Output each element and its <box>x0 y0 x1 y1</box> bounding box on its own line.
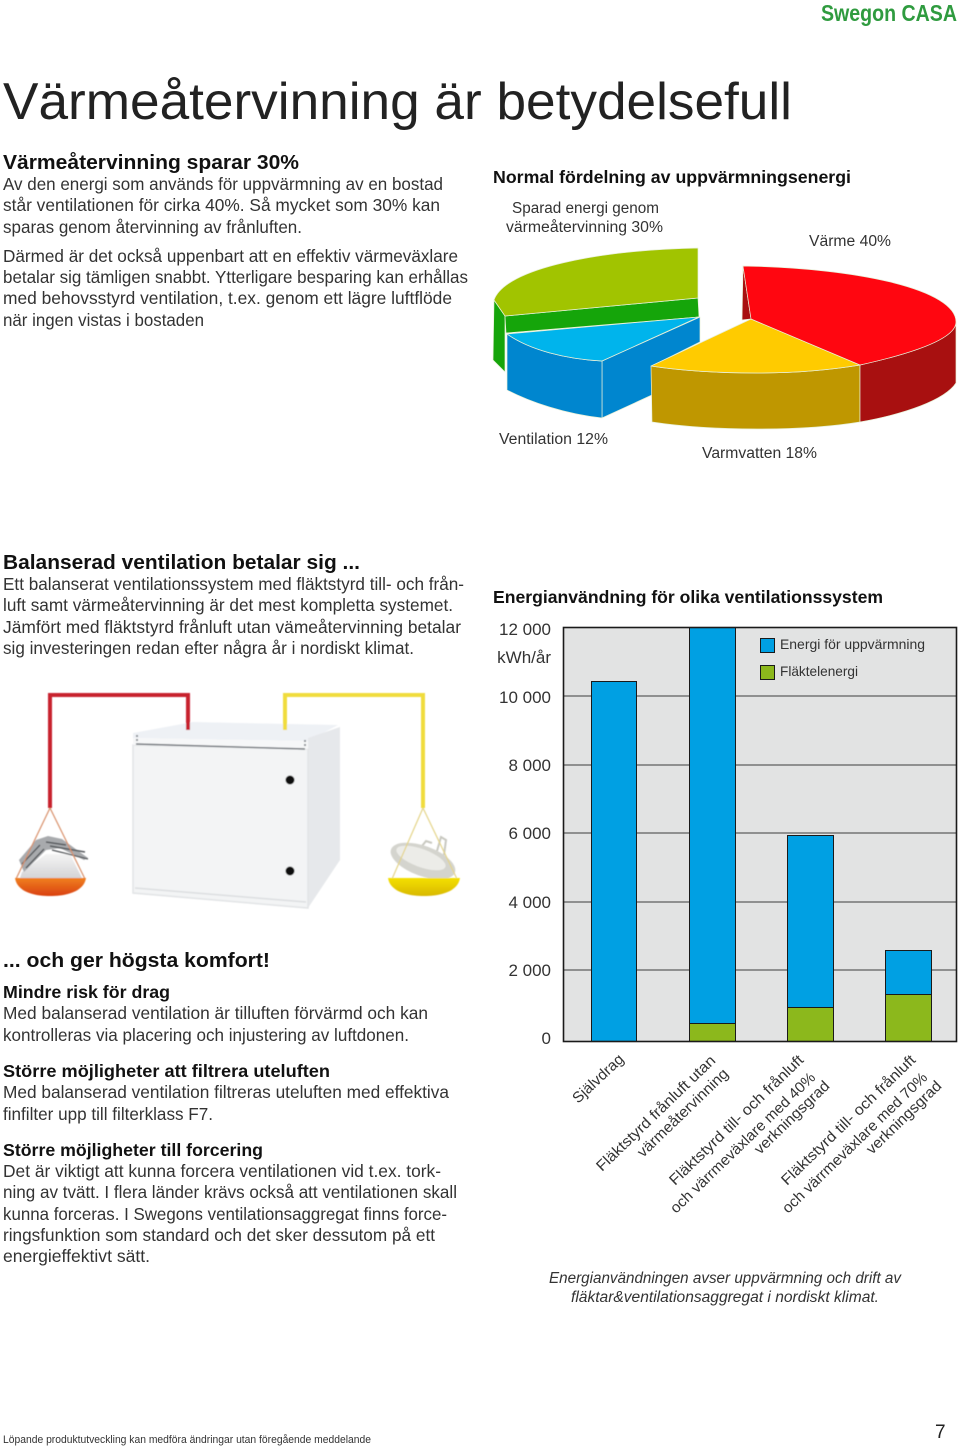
bar: supply and exhaust 40% <box>788 836 834 1042</box>
subsection: boost: Större möjligheter till forcering <box>3 1140 263 1160</box>
text block: balanced ventilation pays off: Jämfört med fläktstyrd frånluft utan väme­återvinning betalar <box>3 617 461 637</box>
x axis labels: och värrmeväxlare med 40% <box>667 1069 819 1217</box>
bar: fan-controlled exhaust <box>690 628 736 1042</box>
bar: supply and exhaust 70% <box>886 950 932 1042</box>
x axis labels: Fläktstyrd frånluft utan <box>593 1052 719 1175</box>
chart caption: Energianvändningen avser uppvärmning och drift av <box>549 1270 902 1287</box>
text block: balanced ventilation pays off: Ett balanserat ventilationssystem med fläktstyrd till- och från- <box>3 574 464 594</box>
footer note: Löpande produktutveckling kan medföra ändringar utan föregående meddelande <box>3 1434 371 1446</box>
text block: heat recovery saves 30%: sparas genom återvinning av frånluften. <box>3 217 302 237</box>
y axis labels: 0 <box>542 1029 551 1048</box>
chart caption: fläktar&ventilationsaggregat i nordiskt klimat. <box>571 1289 879 1306</box>
text block: heat recovery saves 30%: Av den energi som används för uppvärmning av en bostad <box>3 174 443 194</box>
text block: heat recovery saves 30% <box>3 151 468 330</box>
x axis labels: verkningsgrad <box>863 1078 945 1158</box>
subsection: filtering: Med balanserad ventilation filtreras uteluften med effektiva <box>3 1082 449 1102</box>
y axis labels: 2 000 <box>508 961 551 980</box>
subsection: boost: energieffektivt sätt. <box>3 1246 150 1266</box>
x axis labels: Självdrag <box>569 1051 628 1107</box>
text block: balanced ventilation pays off <box>3 552 464 658</box>
x axis labels: Fläktstyrd till- och frånluft <box>666 1051 808 1189</box>
text block: heat recovery saves 30%: med behovsstyrd ventilation, t.ex. genom ett lägre luftflöde <box>3 288 452 308</box>
y axis labels: 10 000 <box>499 688 551 707</box>
text block: heat recovery saves 30%: betalar sig tämligen snabbt. Ytterligare besparing kan erhållas <box>3 267 468 287</box>
subsection: boost: ringsfunktion som standard och det sker dessutom på ett <box>3 1225 435 1245</box>
subsection: less draught: Mindre risk för drag <box>3 982 170 1002</box>
x axis labels <box>569 1051 945 1217</box>
x axis labels: och värrmeväxlare med 70% <box>779 1069 931 1217</box>
text block: heat recovery saves 30%: Värmeåtervinning sparar 30% <box>3 151 299 174</box>
pie label: heating: Värme 40% <box>809 233 891 250</box>
slice: ventilation 12% <box>507 317 700 418</box>
bar chart heading: Energianvändning för olika ventilationssystem <box>493 587 883 607</box>
unit cabinet <box>133 722 340 908</box>
slice: saved energy 30% <box>493 248 699 372</box>
text block: balanced ventilation pays off: sig investeringen redan efter några år i nordiskt klimat. <box>3 638 414 658</box>
pie chart: energy distribution <box>493 248 956 429</box>
subsection: boost: kunna forceras. I Swegons ventilationsaggregat finns force- <box>3 1204 447 1224</box>
title: Värmeåtervinning är betydelsefull <box>3 73 792 131</box>
text block: heat recovery saves 30%: står ventilationen för cirka 40%. Så mycket som 30% kan <box>3 195 440 215</box>
text block: heat recovery saves 30%: Därmed är det också uppenbart att en effektiv värmeväxlare <box>3 246 458 266</box>
right scale pan with plates <box>386 808 460 896</box>
subsection: filtering: finfilter upp till filterklass F7. <box>3 1104 213 1124</box>
pie label: saved energy: Sparad energi genom <box>512 200 659 217</box>
pie label: hot water: Varmvatten 18% <box>702 445 817 462</box>
pie label: saved energy <box>506 200 663 236</box>
subsection: boost: ning av tvätt. I flera länder krävs också att ventilationen skall <box>3 1182 457 1202</box>
text block: balanced ventilation pays off: Balanserad ventilation betalar sig ... <box>3 552 360 574</box>
y axis labels: 4 000 <box>508 893 551 912</box>
legend <box>760 636 925 680</box>
chart caption <box>549 1270 902 1306</box>
pie label: saved energy: värmeåtervinning 30% <box>506 219 663 236</box>
legend: Fläktelenergi <box>780 663 858 679</box>
page number: 7 <box>935 1422 946 1443</box>
illustration: ventilation unit balancing two scales <box>15 695 460 908</box>
x axis labels: värmeåtervinning <box>634 1065 732 1161</box>
x axis labels: verkningsgrad <box>751 1078 833 1158</box>
text block: highest comfort: ... och ger högsta komfort! <box>3 950 270 972</box>
legend: Energi för uppvärmning <box>780 636 925 652</box>
pie chart heading: Normal fördelning av uppvärmningsenergi <box>493 167 851 187</box>
red supply pipe <box>50 695 188 808</box>
bar: natural draught <box>592 682 636 1042</box>
subsection: filtering: Större möjligheter att filtrera uteluften <box>3 1061 330 1081</box>
text block: heat recovery saves 30%: när ingen vistas i bostaden <box>3 310 204 330</box>
text block: highest comfort <box>3 950 457 1266</box>
text block: balanced ventilation pays off: luft samt värmeåtervinning är det mest kompletta systemet. <box>3 595 453 615</box>
y axis labels: kWh/år <box>497 648 551 667</box>
subsection: filtering <box>3 1061 449 1124</box>
x axis labels: Fläktstyrd till- och frånluft <box>778 1051 920 1189</box>
bar chart: energy use per ventilation system <box>497 620 957 1217</box>
y axis labels: 12 000 <box>499 620 551 639</box>
subsection: less draught: Med balanserad ventilation är tilluften förvärmd och kan <box>3 1003 428 1023</box>
subsection: less draught: kontrolleras via placering och injustering av luftdonen. <box>3 1025 409 1045</box>
subsection: boost: Det är viktigt att kunna forcera ventilationen vid t.ex. tork- <box>3 1161 441 1181</box>
yellow exhaust pipe <box>285 695 423 808</box>
left scale pan with forks <box>15 808 88 896</box>
subsection: boost <box>3 1140 457 1266</box>
pie label: ventilation: Ventilation 12% <box>499 431 608 448</box>
y axis labels <box>497 620 551 1048</box>
y axis labels: 6 000 <box>508 824 551 843</box>
slice: heating 40% <box>742 266 956 422</box>
y axis labels: 8 000 <box>508 756 551 775</box>
slice: hot water 18% <box>651 319 860 429</box>
subsection: less draught <box>3 982 428 1045</box>
